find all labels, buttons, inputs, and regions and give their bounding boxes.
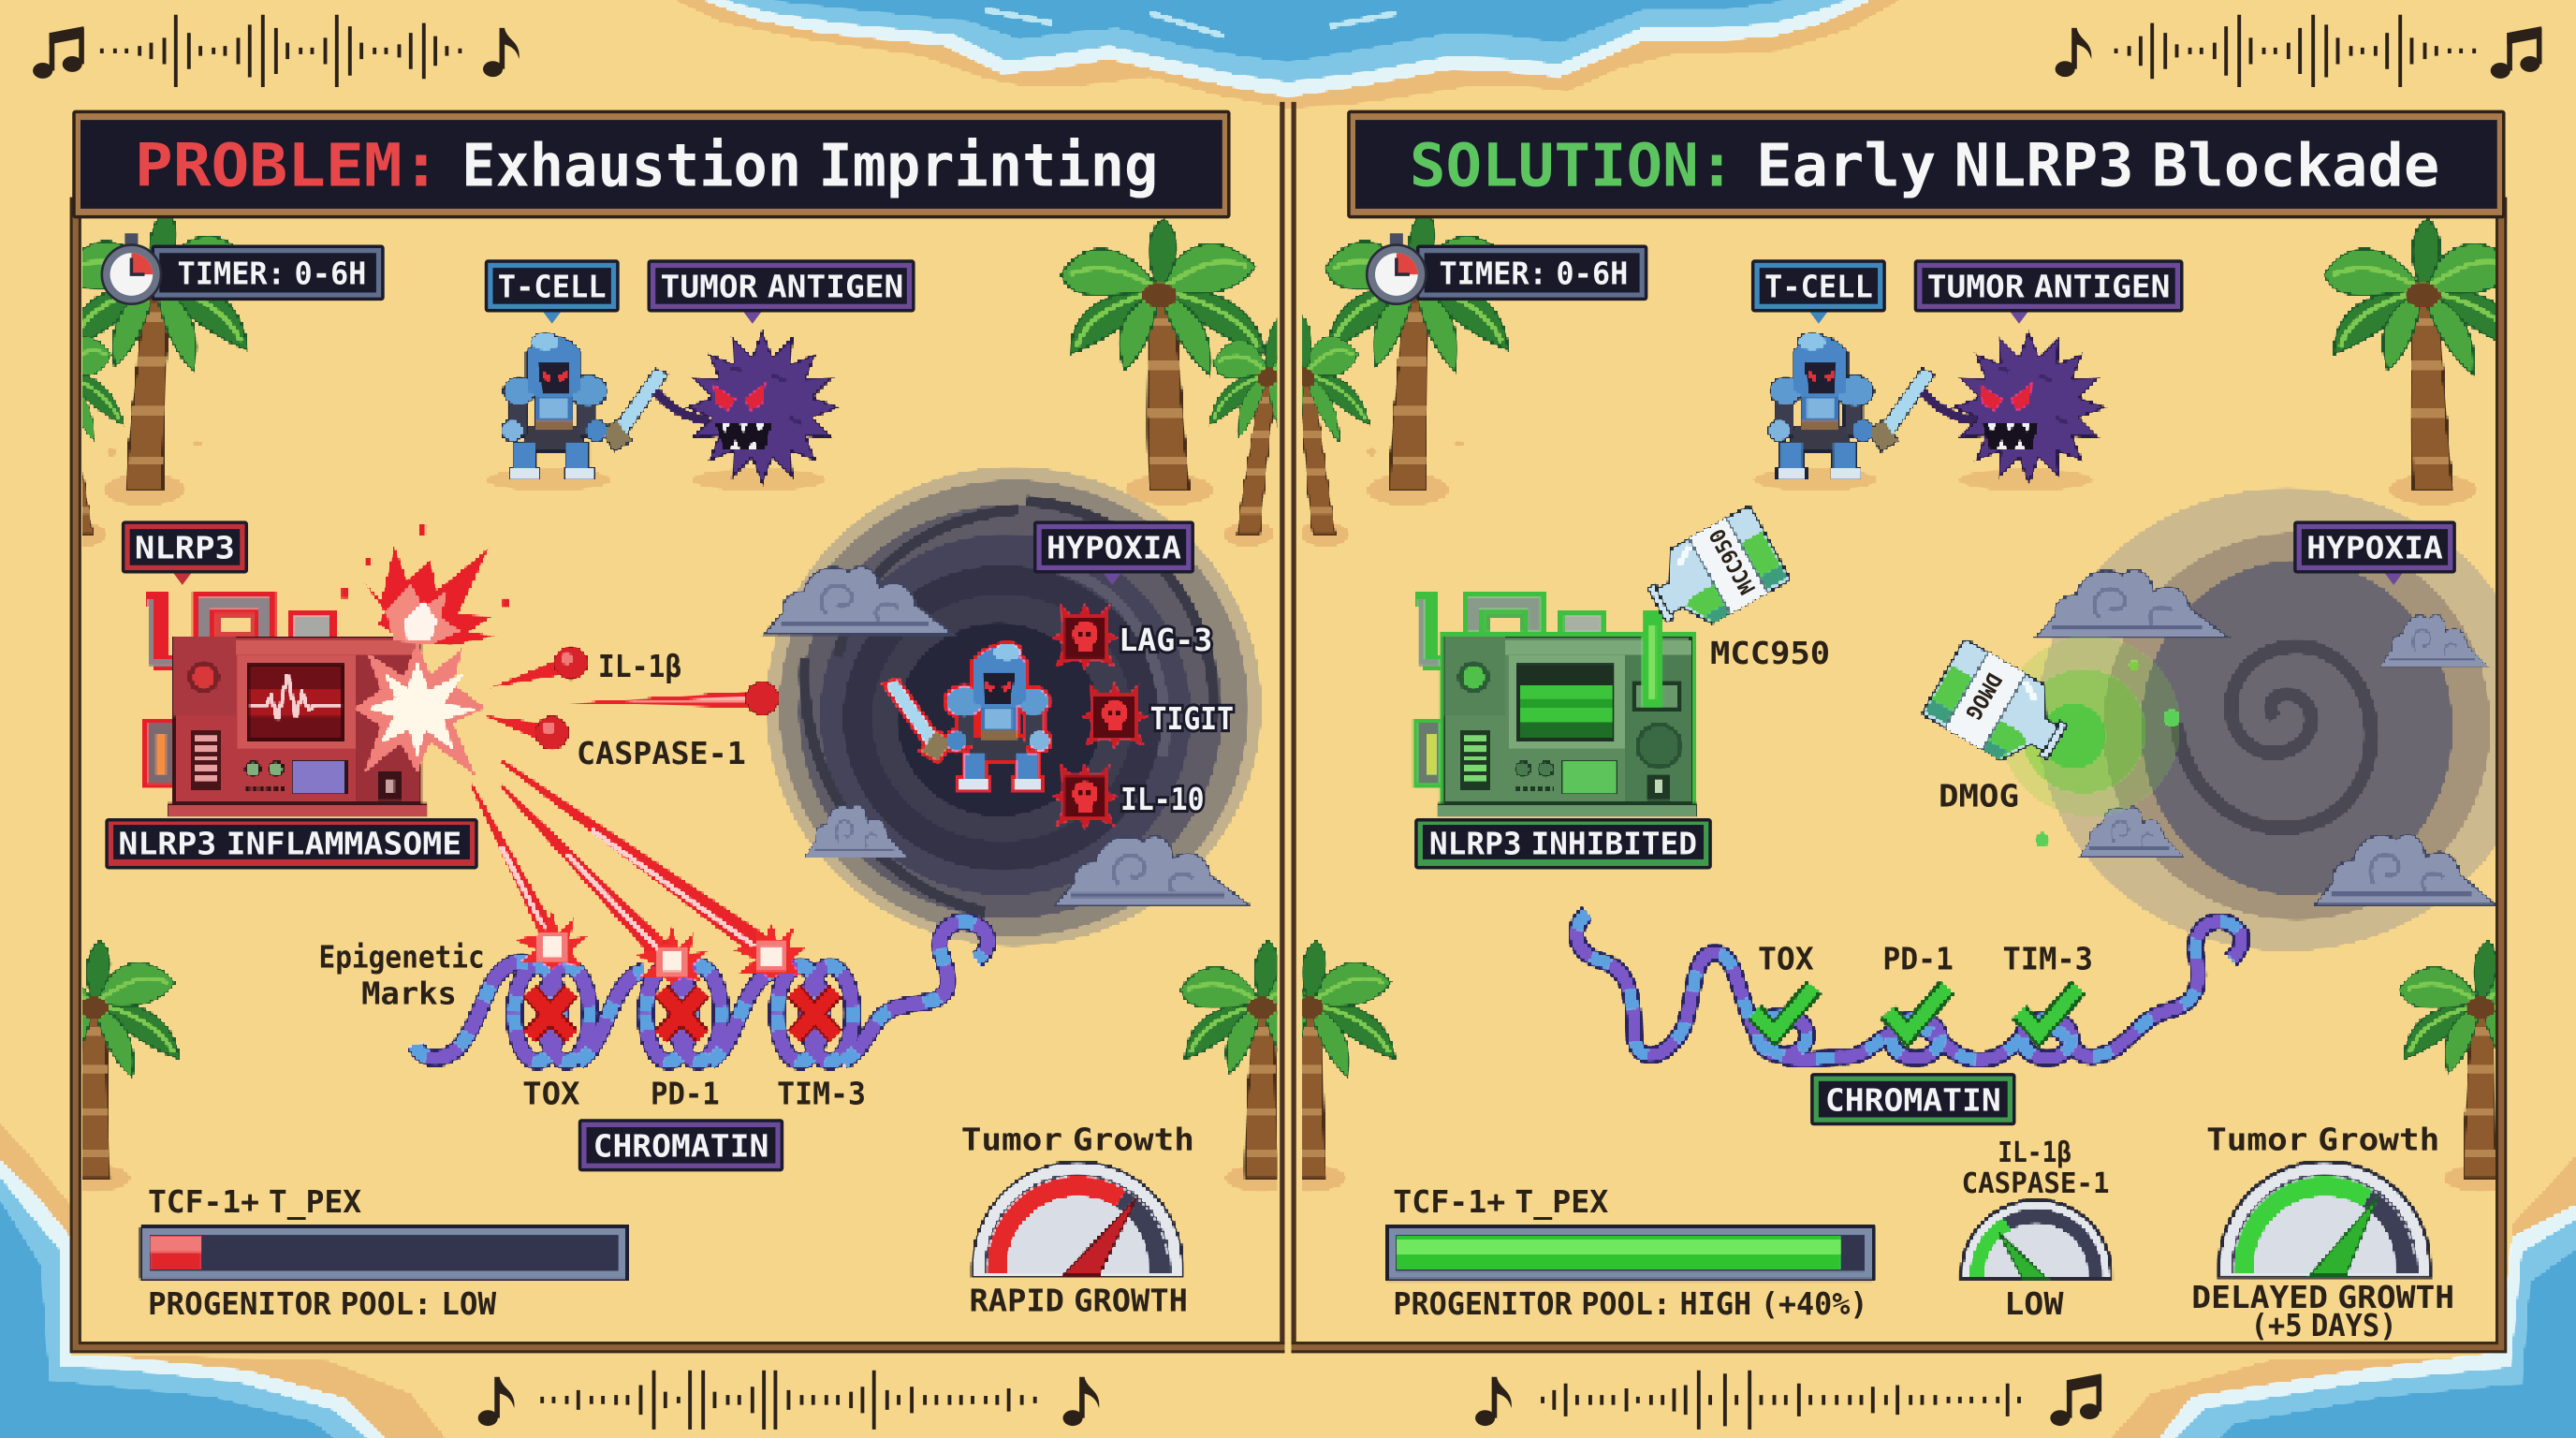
- audio waveform: top right: [2056, 15, 2541, 87]
- skull markers: LAG-3, TIGIT, IL-10: [1052, 603, 1148, 829]
- tumor growth gauge, delayed: [2219, 1162, 2430, 1277]
- tag: hypoxia: HYPOXIA: [2306, 530, 2443, 566]
- tag: timer 0-6H: [1367, 233, 1647, 304]
- MCC950 bottle: [1636, 506, 1791, 642]
- tumor antigen virus: [1922, 332, 2104, 492]
- bottle label: DMOG: DMOG: [1960, 668, 2006, 724]
- labels: exhaustion markers: TIGIT: [1150, 700, 1234, 737]
- t-cell knight: [1753, 333, 1934, 492]
- progenitor pool bar, low: [139, 1225, 629, 1282]
- label: rapid growth: RAPID GROWTH: [970, 1283, 1188, 1319]
- green stream poured into machine: [1647, 611, 1659, 707]
- cytokine projectiles: IL-1β and CASPASE-1: [481, 647, 779, 749]
- explosion burst at inflammasome: [342, 524, 509, 777]
- label: epigenetic marks: [318, 939, 485, 1011]
- tag: timer 0-6H: TIMER: 0-6H: [1439, 256, 1628, 292]
- clouds around vortex: [764, 566, 1250, 905]
- NLRP3 inhibited machine, green: [1412, 592, 1697, 816]
- label: TCF-1+ T_PEX: TCF-1+ T_PEX: [148, 1183, 361, 1220]
- audio waveform: bottom right: [1475, 1371, 2101, 1430]
- panel: problem, exhaustion imprinting: [0, 102, 1348, 1349]
- gene labels: TOX, PD-1, TIM-3: PD-1: [1882, 941, 1954, 977]
- tag: T-cell: [1751, 259, 1886, 324]
- tag: chromatin: [1810, 1073, 2016, 1125]
- labels: exhaustion markers: LAG-3: [1119, 622, 1212, 658]
- label: IL-1β and caspase-1 gauge title: CASPASE-1: [1962, 1167, 2110, 1200]
- hypoxia vortex: [766, 466, 1262, 946]
- tag: hypoxia: [1033, 521, 1194, 585]
- DMOG bottle: [1922, 638, 2079, 780]
- green drug cloud on vortex: [1999, 636, 2180, 847]
- gene labels: TOX, PD-1, TIM-3: [1758, 941, 2093, 977]
- clouds around vortex: [2036, 570, 2496, 905]
- label: tumor growth: Tumor Growth: [961, 1122, 1194, 1158]
- label: IL-1β and caspase-1 gauge title: IL-1β: [1998, 1137, 2071, 1169]
- tag: chromatin: [578, 1119, 783, 1171]
- tag: T-cell: T-CELL: [498, 269, 607, 305]
- gene labels: TOX, PD-1, TIM-3: [522, 1075, 866, 1111]
- labels: IL-1β and CASPASE-1: [577, 648, 746, 771]
- tag: tumor antigen: TUMOR ANTIGEN: [661, 269, 903, 305]
- palm trees: solution panel: [1302, 218, 2496, 1191]
- title bar: problem: Exhaustion Imprinting: [461, 130, 1158, 199]
- label: MCC950: MCC950: [1710, 635, 1830, 671]
- tag: timer 0-6H: TIMER: 0-6H: [178, 256, 366, 292]
- labels: IL-1β and CASPASE-1: CASPASE-1: [577, 735, 746, 771]
- label: epigenetic marks: Marks: [361, 975, 457, 1011]
- label: progenitor pool high: PROGENITOR POOL: HIGH (+40%): [1393, 1285, 1868, 1322]
- audio waveform: bottom left: [478, 1371, 1099, 1430]
- label: TCF-1+ T_PEX: TCF-1+ T_PEX: [1393, 1183, 1608, 1220]
- tumor antigen virus: [655, 332, 838, 492]
- label: low: LOW: [2004, 1285, 2064, 1322]
- tag: NLRP3 inflammasome: NLRP3 INFLAMMASOME: [118, 826, 461, 862]
- tag: T-cell: [485, 259, 620, 324]
- tag: tumor antigen: [1914, 259, 2184, 324]
- label: IL-1β and caspase-1 gauge title: [1962, 1137, 2110, 1200]
- palm trees: problem panel: [0, 211, 1348, 1192]
- label: delayed growth, plus 5 days: [2191, 1279, 2454, 1343]
- title bar: problem: [72, 110, 1231, 218]
- tag: chromatin: CHROMATIN: [593, 1128, 768, 1165]
- tag: NLRP3 inhibited: NLRP3 INHIBITED: [1429, 826, 1697, 862]
- tag: hypoxia: HYPOXIA: [1046, 530, 1181, 566]
- t-cell knight: [487, 333, 667, 492]
- label: delayed growth, plus 5 days: (+5 DAYS): [2250, 1307, 2397, 1343]
- tag: tumor antigen: TUMOR ANTIGEN: [1927, 269, 2170, 305]
- labels: exhaustion markers: IL-10: [1120, 781, 1204, 817]
- laser rays hitting chromatin: [470, 759, 808, 984]
- label: delayed growth, plus 5 days: DELAYED GROWTH: [2191, 1279, 2454, 1315]
- label: progenitor pool low: PROGENITOR POOL: LOW: [148, 1285, 497, 1322]
- gene labels: TOX, PD-1, TIM-3: TOX: [522, 1075, 580, 1111]
- title bar: solution: SOLUTION:: [1410, 130, 1734, 199]
- IL-1β caspase-1 gauge, low: [1962, 1200, 2111, 1278]
- gene labels: TOX, PD-1, TIM-3: TIM-3: [777, 1075, 866, 1111]
- title bar: solution: [1347, 110, 2506, 218]
- bottle label: MCC950: MCC950: [1705, 524, 1761, 598]
- tag: chromatin: CHROMATIN: [1825, 1081, 2001, 1118]
- gene labels: TOX, PD-1, TIM-3: TIM-3: [2002, 941, 2093, 977]
- tumor growth gauge, rapid: [973, 1162, 1183, 1277]
- tag: hypoxia: [2293, 521, 2456, 585]
- labels: IL-1β and CASPASE-1: IL-1β: [598, 648, 681, 684]
- hypoxia vortex, fading: [2037, 488, 2537, 951]
- panel frame: problem: [76, 102, 1284, 1349]
- labels: exhaustion markers: [1119, 622, 1234, 817]
- tag: NLRP3: NLRP3: [135, 530, 235, 566]
- exhausted t-cell: [886, 644, 1050, 788]
- audio waveform: top left: [33, 15, 520, 87]
- NLRP3 inflammasome machine, red: [143, 592, 427, 816]
- gene labels: TOX, PD-1, TIM-3: PD-1: [651, 1075, 720, 1111]
- tag: tumor antigen: [648, 259, 915, 324]
- chromatin strand, solution: [1576, 914, 2242, 1060]
- gene labels: TOX, PD-1, TIM-3: TOX: [1758, 941, 1814, 977]
- tag: T-cell: T-CELL: [1764, 269, 1873, 305]
- label: DMOG: DMOG: [1939, 778, 2019, 814]
- panel: solution, early NLRP3 blockade: [1228, 102, 2567, 1349]
- label: epigenetic marks: Epigenetic: [318, 939, 485, 976]
- epigenetic red X marks: [529, 990, 836, 1036]
- tag: NLRP3 inflammasome: [105, 818, 478, 869]
- green check marks: [1754, 988, 2078, 1034]
- tag: NLRP3 inhibited: [1414, 818, 1712, 869]
- tag: timer 0-6H: [102, 233, 385, 304]
- tag: NLRP3: [122, 521, 248, 585]
- chromatin strand, problem: [416, 922, 988, 1062]
- panel frame: solution: [1292, 102, 2501, 1349]
- label: tumor growth: Tumor Growth: [2206, 1122, 2439, 1158]
- progenitor pool bar, high: [1385, 1225, 1875, 1282]
- title bar: solution: Early NLRP3 Blockade: [1756, 130, 2439, 199]
- title bar: problem: PROBLEM:: [135, 130, 440, 199]
